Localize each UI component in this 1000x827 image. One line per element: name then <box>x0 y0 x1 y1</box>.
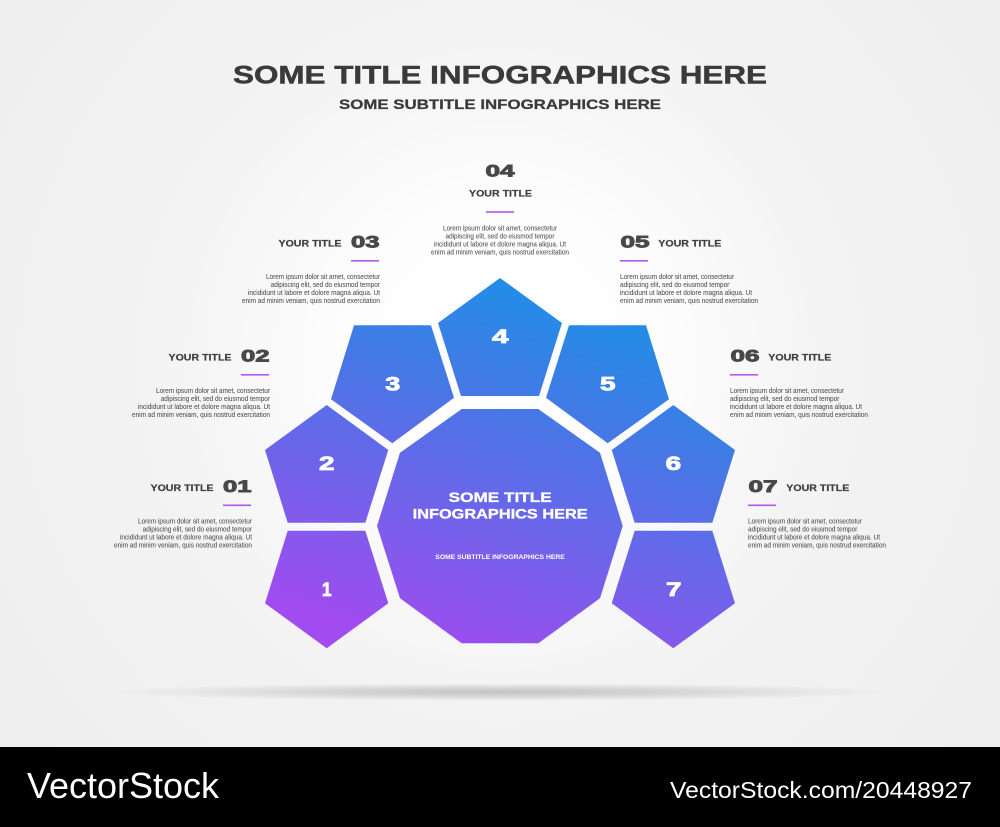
accent line 07 <box>748 504 776 506</box>
label block 07 <box>748 477 886 550</box>
text 02: adipiscing elit, sed do eiusmod tempor <box>161 394 271 403</box>
text 04: enim ad minim veniam, quis nostrud exercitation <box>431 247 569 256</box>
title: SOME TITLE INFOGRAPHICS HERE <box>233 62 767 90</box>
accent line 01 <box>223 504 251 506</box>
text 05: incididunt ut labore et dolore magna aliqua. Ut <box>620 288 752 297</box>
numeral 2: 2 <box>319 454 334 475</box>
text 02: enim ad minim veniam, quis nostrud exercitation <box>132 410 270 419</box>
pentagon 4 <box>438 278 562 396</box>
pentagon 5 <box>546 325 669 443</box>
text 07: adipiscing elit, sed do eiusmod tempor <box>748 524 858 534</box>
text 05 <box>620 272 758 305</box>
text 06: Lorem ipsum dolor sit amet, consectetur <box>730 386 845 395</box>
numeral 4: 4 <box>492 327 509 348</box>
text 03 <box>242 272 381 305</box>
number 07: 07 <box>748 477 778 496</box>
label block 06 <box>730 346 868 419</box>
text 06: enim ad minim veniam, quis nostrud exercitation <box>730 410 868 419</box>
label block 02 <box>132 346 271 419</box>
central decagon <box>377 409 623 643</box>
title 05: YOUR TITLE <box>658 238 721 248</box>
number 05: 05 <box>620 232 650 251</box>
text 03: Lorem ipsum dolor sit amet, consectetur <box>266 272 381 281</box>
accent line 02 <box>241 374 269 376</box>
pentagon 3 <box>331 325 454 443</box>
text 01: Lorem ipsum dolor sit amet, consectetur <box>138 516 253 526</box>
numeral 1: 1 <box>322 580 332 601</box>
accent line 06 <box>730 374 758 376</box>
pentagon 2 <box>265 405 388 523</box>
text 02: incididunt ut labore et dolore magna aliqua. Ut <box>138 402 270 411</box>
numeral 6: 6 <box>666 454 681 475</box>
text 02 <box>132 386 271 419</box>
label block 01 <box>114 477 253 550</box>
title 01: YOUR TITLE <box>150 483 214 493</box>
text 02: Lorem ipsum dolor sit amet, consectetur <box>156 386 271 395</box>
number 06: 06 <box>730 346 760 365</box>
subtitle: SOME SUBTITLE INFOGRAPHICS HERE <box>339 96 661 112</box>
text 04: incididunt ut labore et dolore magna aliqua. Ut <box>434 239 566 248</box>
text 07: enim ad minim veniam, quis nostrud exercitation <box>748 540 886 550</box>
pentagon 7 <box>612 531 735 648</box>
accent line 03 <box>351 260 379 262</box>
title 07: YOUR TITLE <box>786 483 849 493</box>
text 06: incididunt ut labore et dolore magna aliqua. Ut <box>730 402 862 411</box>
text 01: incididunt ut labore et dolore magna aliqua. Ut <box>120 532 252 542</box>
text 05: enim ad minim veniam, quis nostrud exercitation <box>620 296 758 305</box>
number 03: 03 <box>351 232 380 251</box>
title 06: YOUR TITLE <box>768 352 831 362</box>
title 04: YOUR TITLE <box>469 189 532 199</box>
number 01: 01 <box>223 477 252 496</box>
text 03: incididunt ut labore et dolore magna aliqua. Ut <box>248 288 380 297</box>
accent line 04 <box>486 211 514 213</box>
numeral 5: 5 <box>600 374 616 396</box>
text 03: adipiscing elit, sed do eiusmod tempor <box>271 280 381 289</box>
text 04: adipiscing elit, sed do eiusmod tempor <box>446 231 555 240</box>
pentagon 1 <box>265 531 388 648</box>
text 03: enim ad minim veniam, quis nostrud exercitation <box>242 296 380 305</box>
label block 03 <box>242 232 381 305</box>
footer bar <box>0 747 1000 827</box>
label block 05 <box>620 232 758 305</box>
center title line 2: INFOGRAPHICS HERE <box>413 506 588 521</box>
ground shadow <box>110 683 890 701</box>
text 01 <box>114 516 253 550</box>
text 04 <box>431 223 569 256</box>
accent line 05 <box>620 260 648 262</box>
pentagon 6 <box>612 405 735 523</box>
text 07: Lorem ipsum dolor sit amet, consectetur <box>748 516 863 526</box>
text 07: incididunt ut labore et dolore magna aliqua. Ut <box>748 532 880 542</box>
number 04: 04 <box>486 162 515 180</box>
label block 04 <box>431 162 569 256</box>
center subtitle: SOME SUBTITLE INFOGRAPHICS HERE <box>435 555 565 561</box>
numeral 7: 7 <box>666 580 682 601</box>
text 07 <box>748 516 886 550</box>
text 01: adipiscing elit, sed do eiusmod tempor <box>143 524 253 534</box>
text 04: Lorem ipsum dolor sit amet, consectetur <box>443 223 558 232</box>
footer id: VectorStock.com/20448927 <box>670 777 972 803</box>
title 03: YOUR TITLE <box>278 238 342 248</box>
text 05: Lorem ipsum dolor sit amet, consectetur <box>620 272 735 281</box>
number 02: 02 <box>241 346 270 365</box>
text 06: adipiscing elit, sed do eiusmod tempor <box>730 394 840 403</box>
center title line 1: SOME TITLE <box>449 490 552 505</box>
title 02: YOUR TITLE <box>168 352 232 362</box>
text 06 <box>730 386 868 419</box>
text 05: adipiscing elit, sed do eiusmod tempor <box>620 280 730 289</box>
footer logo: VectorStock <box>27 765 220 806</box>
text 01: enim ad minim veniam, quis nostrud exercitation <box>114 540 252 550</box>
numeral 3: 3 <box>385 374 400 396</box>
